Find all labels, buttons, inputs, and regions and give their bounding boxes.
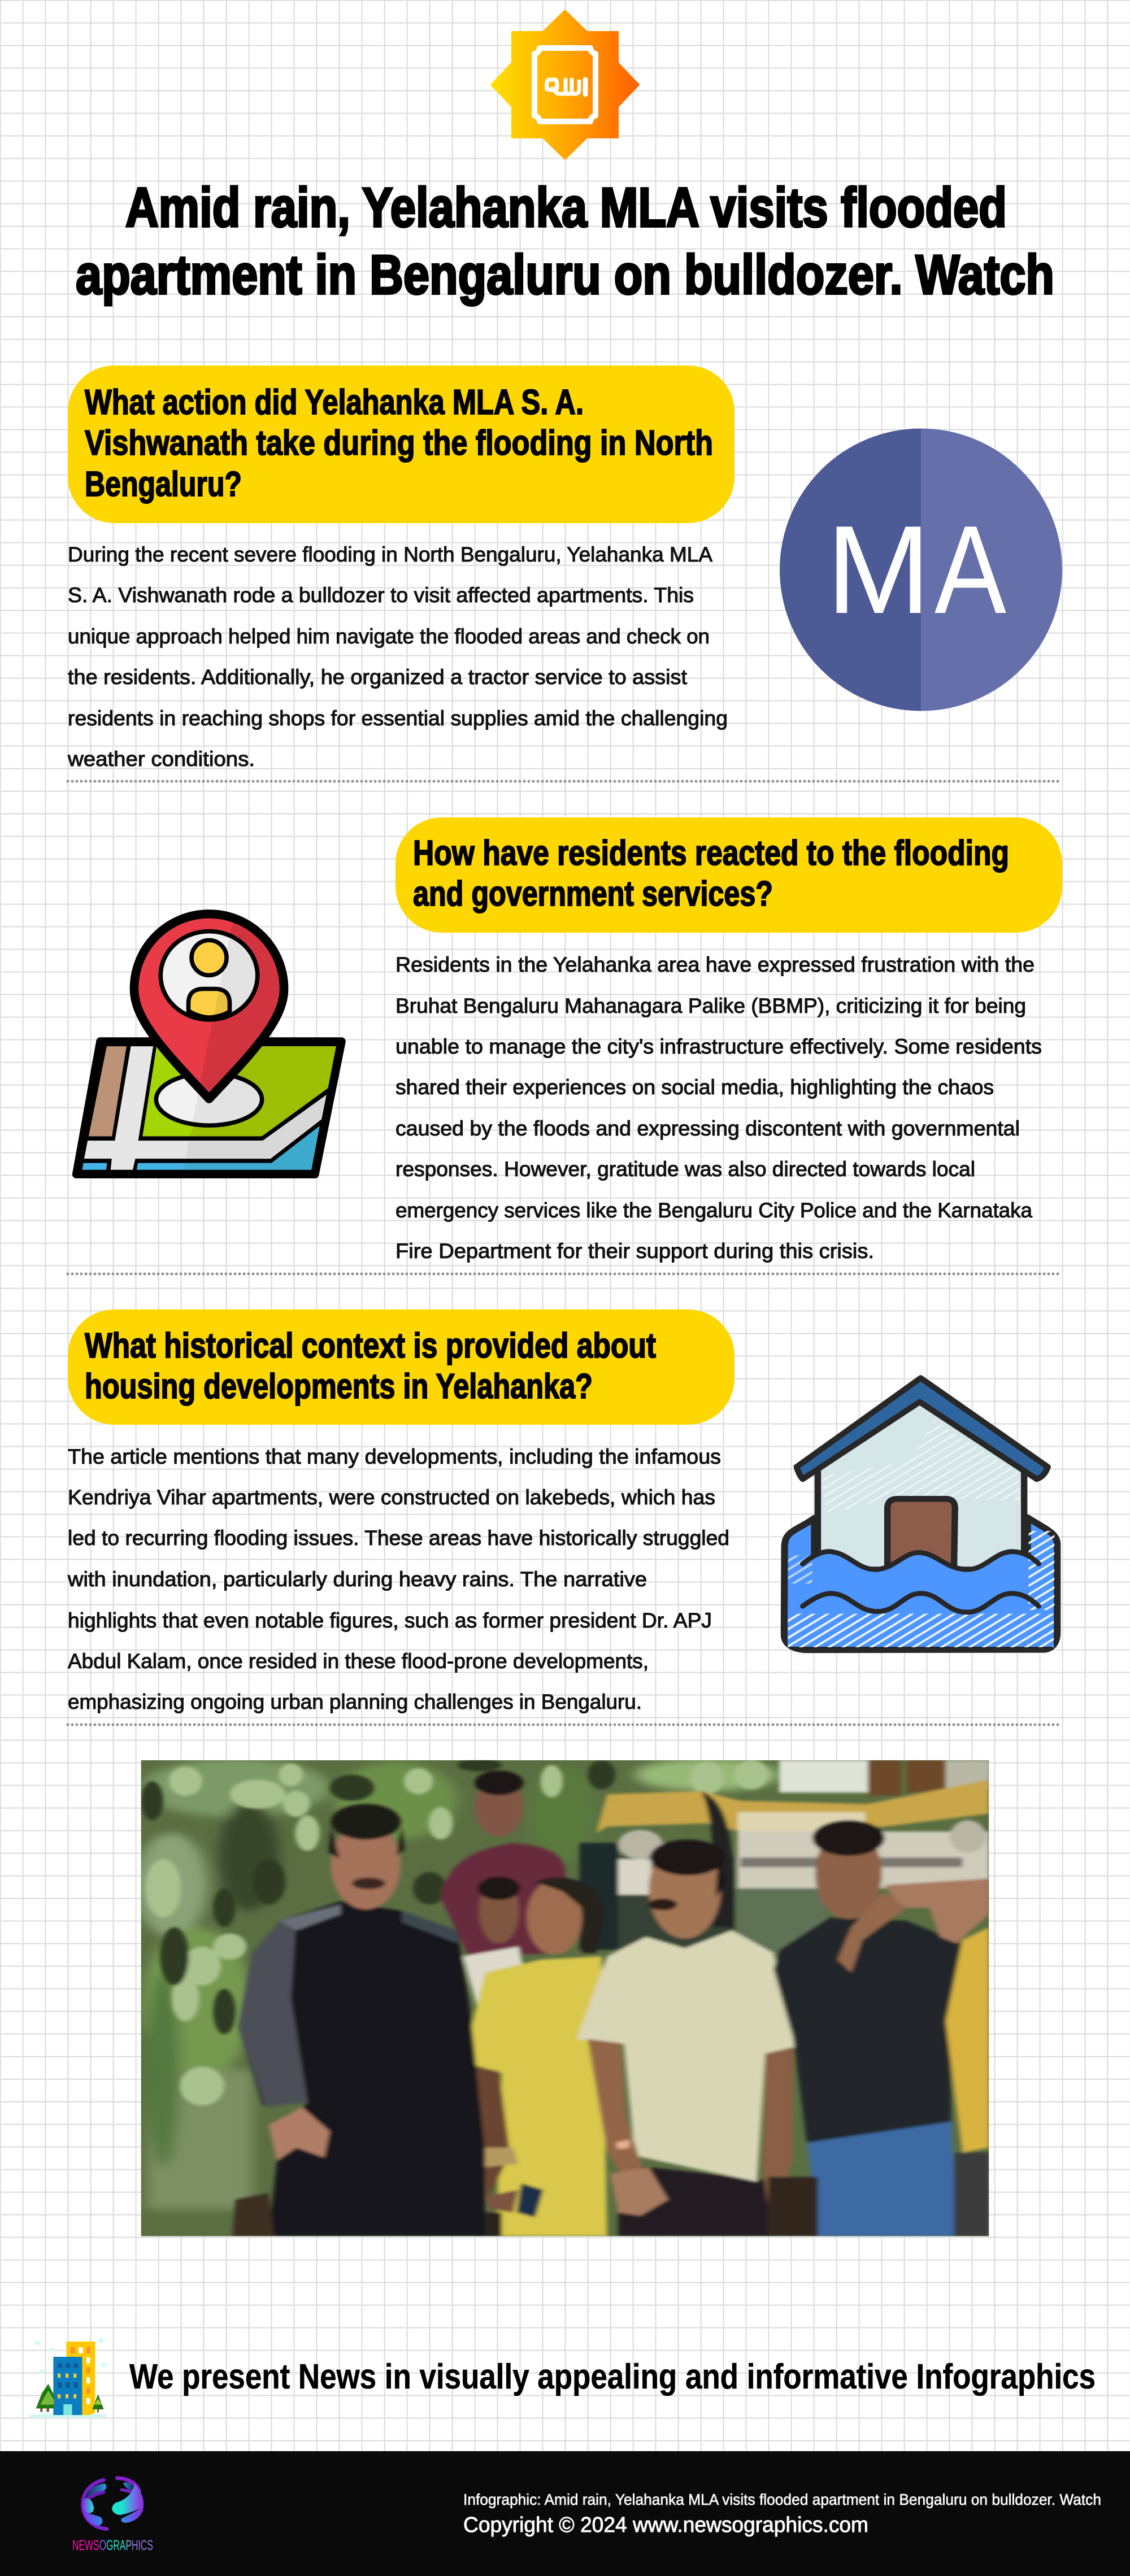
heading pill: what action xyxy=(68,365,734,523)
panel: section 2 residents reaction xyxy=(76,817,1062,1263)
heading pill: what action: Bengaluru? xyxy=(85,465,242,504)
heading pill: residents: and government services? xyxy=(413,874,773,913)
icon: MA avatar circle: A xyxy=(935,500,1006,640)
heading pill: residents: How have residents reacted to the flooding xyxy=(413,834,1009,873)
panel: section 1 action taken xyxy=(67,365,1062,771)
logo wordmark: NEWSOGRAPHICS xyxy=(72,2538,153,2553)
text block: section 3 body: emphasizing ongoing urban planning challenges in Bengaluru. xyxy=(68,1690,642,1713)
text block: section 3 body xyxy=(67,1445,729,1713)
text block: section 1 body: the residents. Additionally, he organized a tractor service to assist xyxy=(68,665,688,689)
polo man xyxy=(807,2115,957,2236)
heading pill: historical context: housing developments in Yelahanka? xyxy=(85,1367,593,1406)
heading pill: historical context xyxy=(68,1309,734,1425)
icon: city buildings xyxy=(29,2338,107,2417)
text block: section 2 body: emergency services like the Bengaluru City Police and the Karnataka xyxy=(395,1199,1032,1222)
text block: section 2 body: responses. However, gratitude was also directed towards local xyxy=(395,1158,975,1181)
white shirt man xyxy=(618,2164,768,2236)
icon: MA avatar circle xyxy=(780,428,1062,711)
text block: section 2 body: unable to manage the city's infrastructure effectively. Some residents xyxy=(395,1035,1042,1058)
text block: section 2 body: caused by the floods and expressing discontent with governmental xyxy=(395,1117,1020,1140)
footer copyright: Copyright © 2024 www.newsographics.com xyxy=(463,2513,868,2537)
far right man xyxy=(946,1927,989,2152)
text block: section 1 body: residents in reaching shops for essential supplies amid the challenging xyxy=(68,707,728,730)
heading pill: what action: What action did Yelahanka MLA S. A. xyxy=(85,383,584,422)
footer band xyxy=(0,2451,1130,2576)
text block: section 2 body: Fire Department for their support during this crisis. xyxy=(395,1239,874,1263)
text block: section 2 body: shared their experiences on social media, highlighting the chaos xyxy=(395,1076,994,1099)
text block: section 3 body: led to recurring flooding issues. These areas have historically struggled xyxy=(68,1526,729,1550)
text block: section 2 body: Bruhat Bengaluru Mahanagara Palike (BBMP), criticizing it for being xyxy=(395,994,1026,1017)
text block: section 3 body: highlights that even notable figures, such as former president Dr. APJ xyxy=(68,1609,712,1632)
text block: section 2 body: Residents in the Yelahanka area have expressed frustration with the xyxy=(395,953,1035,976)
icon: map with location pin xyxy=(76,914,342,1174)
text block: section 1 body: During the recent severe flooding in North Bengaluru, Yelahanka MLA xyxy=(68,543,712,566)
man one black shirt xyxy=(429,2076,474,2177)
icon: top gradient star logo xyxy=(491,10,639,159)
yellow shirt man xyxy=(463,1956,607,2236)
text block: section 1 body: unique approach helped him navigate the flooded areas and check on xyxy=(68,625,710,648)
icon: MA avatar circle: M xyxy=(826,500,931,640)
text block: section 3 body: Kendriya Vihar apartments, were constructed on lakebeds, which has xyxy=(68,1486,715,1509)
back man maroon shirt xyxy=(441,1843,566,1956)
text block: section 1 body xyxy=(67,543,728,771)
heading pill: what action: Vishwanath take during the flooding in North xyxy=(85,424,713,463)
photo: MLA and men beside bulldozer xyxy=(136,1759,990,2236)
footer headline credit: Infographic: Amid rain, Yelahanka MLA visits flooded apartment in Bengaluru on bulldozer. Watch xyxy=(463,2491,1101,2508)
text block: section 3 body: Abdul Kalam, once resided in these flood-prone developments, xyxy=(68,1650,649,1673)
heading pill: historical context: What historical context is provided about xyxy=(85,1326,656,1365)
text block: section 1 body: S. A. Vishwanath rode a bulldozer to visit affected apartments. This xyxy=(68,584,694,607)
text block: section 1 body: weather conditions. xyxy=(67,747,255,771)
icon: Newsographics globe logo xyxy=(82,2478,144,2529)
title xyxy=(76,176,1054,306)
text block: section 2 body xyxy=(395,953,1042,1263)
text block: section 3 body: with inundation, particularly during heavy rains. The narrative xyxy=(67,1568,647,1591)
heading pill: residents xyxy=(395,817,1062,933)
text block: section 3 body: The article mentions that many developments, including the infamous xyxy=(68,1445,721,1468)
panel: section 3 historical context xyxy=(67,1309,1057,1713)
icon: flooded house xyxy=(784,1378,1057,1650)
